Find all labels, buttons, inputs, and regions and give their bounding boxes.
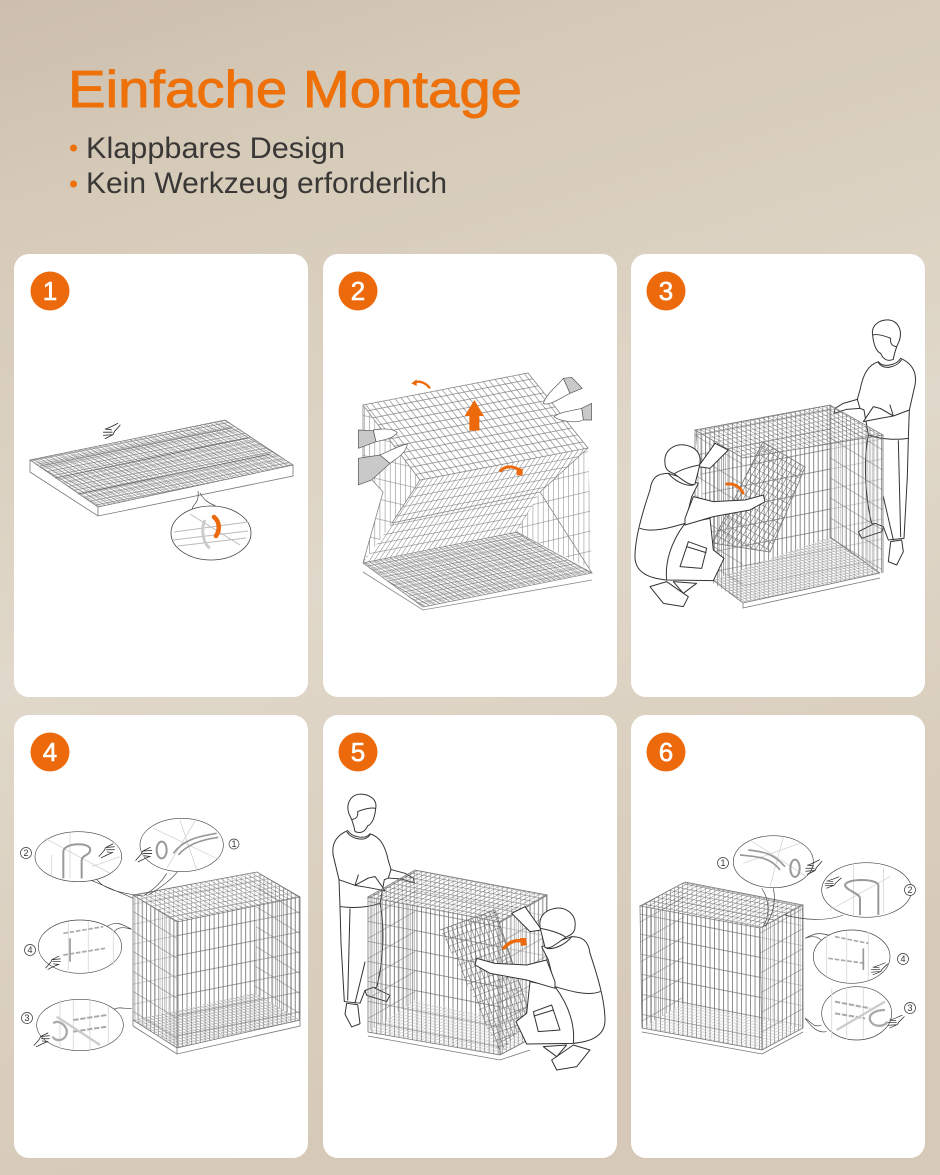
- step markers: 4: [900, 954, 906, 964]
- callout 2: [785, 863, 912, 919]
- step number 5: 5: [351, 737, 365, 767]
- step markers: 3: [24, 1013, 30, 1023]
- cage with door closing: [368, 870, 547, 1060]
- step number 6: [646, 732, 686, 772]
- callouts: [34, 818, 239, 1051]
- arrow: orange: [504, 938, 527, 948]
- bullet: Klappbares Design: Klappbares Design: [86, 132, 345, 165]
- callout 2: [35, 832, 142, 898]
- half-unfolded cage: [363, 373, 592, 610]
- step number 2: [338, 272, 378, 310]
- step markers: 3: [907, 1003, 913, 1013]
- step number 2: 2: [351, 276, 365, 306]
- step markers: 1: [720, 858, 726, 868]
- icon: hand: [103, 423, 120, 439]
- icons: hands: [358, 377, 592, 485]
- callout 4: [38, 920, 132, 973]
- callout 1: [136, 818, 239, 896]
- step markers: 2: [907, 885, 913, 895]
- bullet: Kein Werkzeug erforderlich: Kein Werkzeug erforderlich: [86, 167, 447, 200]
- cage with door swung open: [695, 405, 883, 608]
- callout 3: [34, 999, 132, 1051]
- step markers: 1: [231, 839, 237, 849]
- callout 3: [805, 987, 904, 1040]
- step markers: [718, 858, 916, 1014]
- person crouching: [635, 443, 765, 607]
- arrows: orange: [411, 379, 523, 475]
- person standing: [834, 320, 916, 565]
- step number 1: [30, 272, 70, 310]
- panel: step 4: [14, 715, 308, 1158]
- title: Einfache Montage: [68, 61, 522, 119]
- step number 5: [338, 732, 378, 772]
- step number 1: 1: [43, 276, 57, 306]
- step number 3: [646, 272, 686, 310]
- arrow: orange hook: [214, 517, 219, 536]
- callout: clip detail: [171, 491, 251, 560]
- panel: step 3: [631, 254, 925, 697]
- step number 3: 3: [659, 276, 673, 306]
- step markers: 4: [27, 945, 33, 955]
- assembled cage: [133, 872, 300, 1054]
- step markers: 2: [23, 848, 29, 858]
- panel: step 2: [323, 254, 617, 697]
- step number 6: 6: [659, 737, 673, 767]
- assembled cage: [640, 882, 803, 1054]
- step number 4: 4: [43, 737, 57, 767]
- bullet list: [70, 132, 447, 200]
- callout 1: [733, 836, 822, 927]
- folded cage: [30, 420, 293, 516]
- callout 4: [805, 930, 890, 983]
- panel: step 1: [14, 254, 308, 697]
- person crouching: [475, 907, 605, 1070]
- panel: step 6: [631, 715, 925, 1158]
- callouts: [733, 836, 912, 1040]
- person standing: [333, 794, 414, 1027]
- arrow: orange: [727, 484, 743, 493]
- step number 4: [30, 732, 70, 772]
- panel: step 5: [323, 715, 617, 1158]
- step markers: [20, 839, 237, 1024]
